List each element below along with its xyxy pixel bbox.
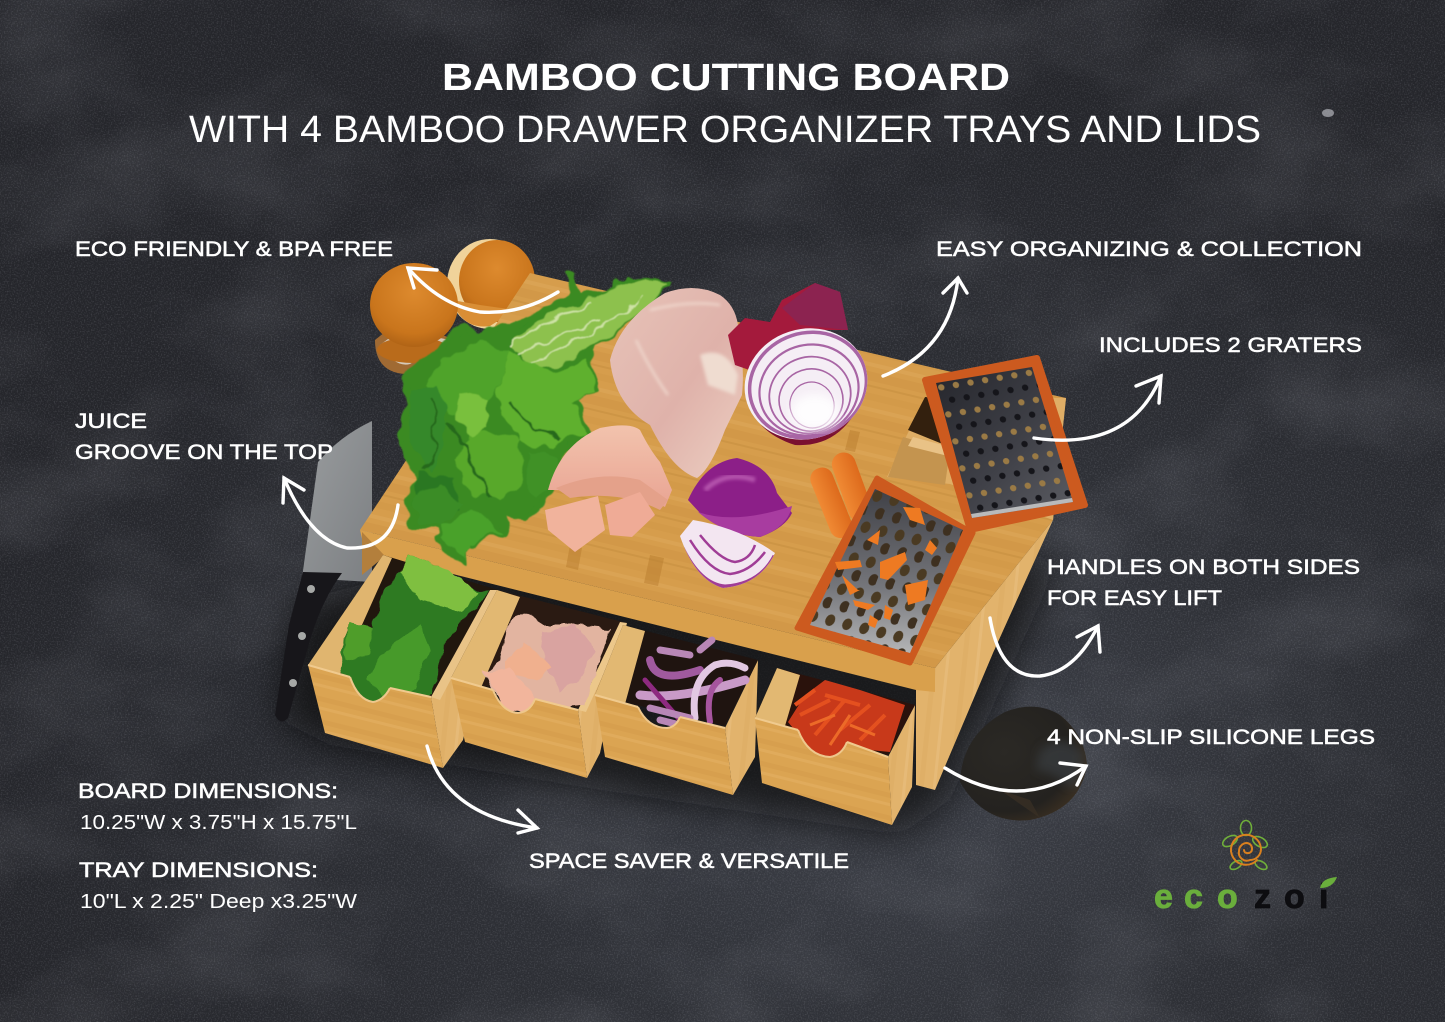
arrow: includes graters — [1034, 376, 1161, 440]
wordmark: eco zoi — [1154, 878, 1328, 916]
title: WITH 4 BAMBOO DRAWER ORGANIZER TRAYS AND LIDS — [189, 109, 1261, 151]
logo: ecozoi turtle and wordmark — [1154, 820, 1337, 916]
label: includes graters: INCLUDES 2 GRATERS — [1099, 333, 1362, 357]
board top surface — [360, 273, 1066, 668]
knife blade — [302, 421, 372, 582]
label: non-slip legs: 4 NON-SLIP SILICONE LEGS — [1047, 725, 1375, 749]
board handle slot — [1000, 545, 1022, 582]
label: space saver: SPACE SAVER & VERSATILE — [529, 849, 849, 873]
label: juice groove — [75, 409, 333, 464]
icon: knife — [275, 421, 372, 721]
icon: red onion half — [728, 283, 868, 446]
panel: drawer 2 with chicken — [451, 590, 627, 778]
title — [189, 57, 1261, 151]
panel: bamboo cutting board body — [360, 273, 1066, 790]
icon: red onion slices — [680, 520, 775, 588]
label: juice groove: GROOVE ON THE TOP — [75, 440, 333, 464]
label: juice groove: JUICE — [75, 409, 147, 433]
icon: leaf — [1320, 877, 1337, 888]
bamboo knot marks — [566, 430, 860, 586]
label: easy organizing: EASY ORGANIZING & COLLECTION — [936, 237, 1362, 261]
lettuce lower leaves — [410, 485, 462, 527]
icon: box grater with carrot — [797, 478, 973, 663]
icon: chicken breast — [610, 288, 743, 478]
arrow: eco friendly — [408, 268, 558, 312]
board front lip — [360, 530, 935, 692]
title: BAMBOO CUTTING BOARD — [442, 57, 1010, 99]
arrow: space saver — [427, 746, 537, 833]
icon: lettuce — [400, 275, 670, 560]
arrow: handles — [990, 618, 1100, 676]
arrow: juice groove — [283, 478, 398, 548]
lettuce stem leaf — [505, 282, 670, 372]
icon: carrots — [807, 449, 876, 541]
drawer 1 contents: lettuce — [340, 554, 488, 708]
drawer 3 contents: onion strips — [640, 640, 745, 725]
grated carrot pieces — [835, 507, 937, 628]
label: handles: HANDLES ON BOTH SIDES — [1047, 555, 1360, 579]
panel: drawer 4 with shredded carrot — [755, 668, 915, 825]
label: handles: FOR EASY LIFT — [1047, 586, 1222, 610]
drawer 2 contents: chicken pieces — [483, 612, 610, 716]
icon: red onion wedge — [688, 458, 792, 537]
icon: flat grater — [925, 358, 1085, 530]
icon: turtle — [1221, 820, 1269, 871]
label: handles — [1047, 555, 1360, 610]
panel: drawer 3 with sliced onion — [595, 625, 758, 795]
panel: drawer 1 with lettuce — [308, 554, 498, 768]
icon: burger buns on plate — [370, 239, 535, 374]
icon: chicken pieces — [545, 425, 672, 552]
text block: dimensions: 10.25"W x 3.75"H x 15.75"L — [80, 812, 357, 834]
text block: dimensions: 10"L x 2.25" Deep x3.25"W — [80, 891, 357, 913]
arrow: easy organizing — [883, 278, 967, 376]
drawer 4 contents: carrot shreds — [788, 680, 905, 762]
board right side face — [916, 520, 1053, 790]
text block: dimensions — [78, 779, 357, 913]
product shadow — [280, 500, 1060, 835]
text block: dimensions: BOARD DIMENSIONS: — [78, 779, 338, 803]
icon: avocado — [960, 707, 1087, 821]
text block: dimensions: TRAY DIMENSIONS: — [79, 858, 318, 882]
knife handle — [275, 572, 342, 721]
arrow: non-slip legs — [945, 763, 1086, 791]
tray compartment cut-out — [887, 397, 1066, 520]
label: eco friendly: ECO FRIENDLY & BPA FREE — [75, 237, 393, 261]
